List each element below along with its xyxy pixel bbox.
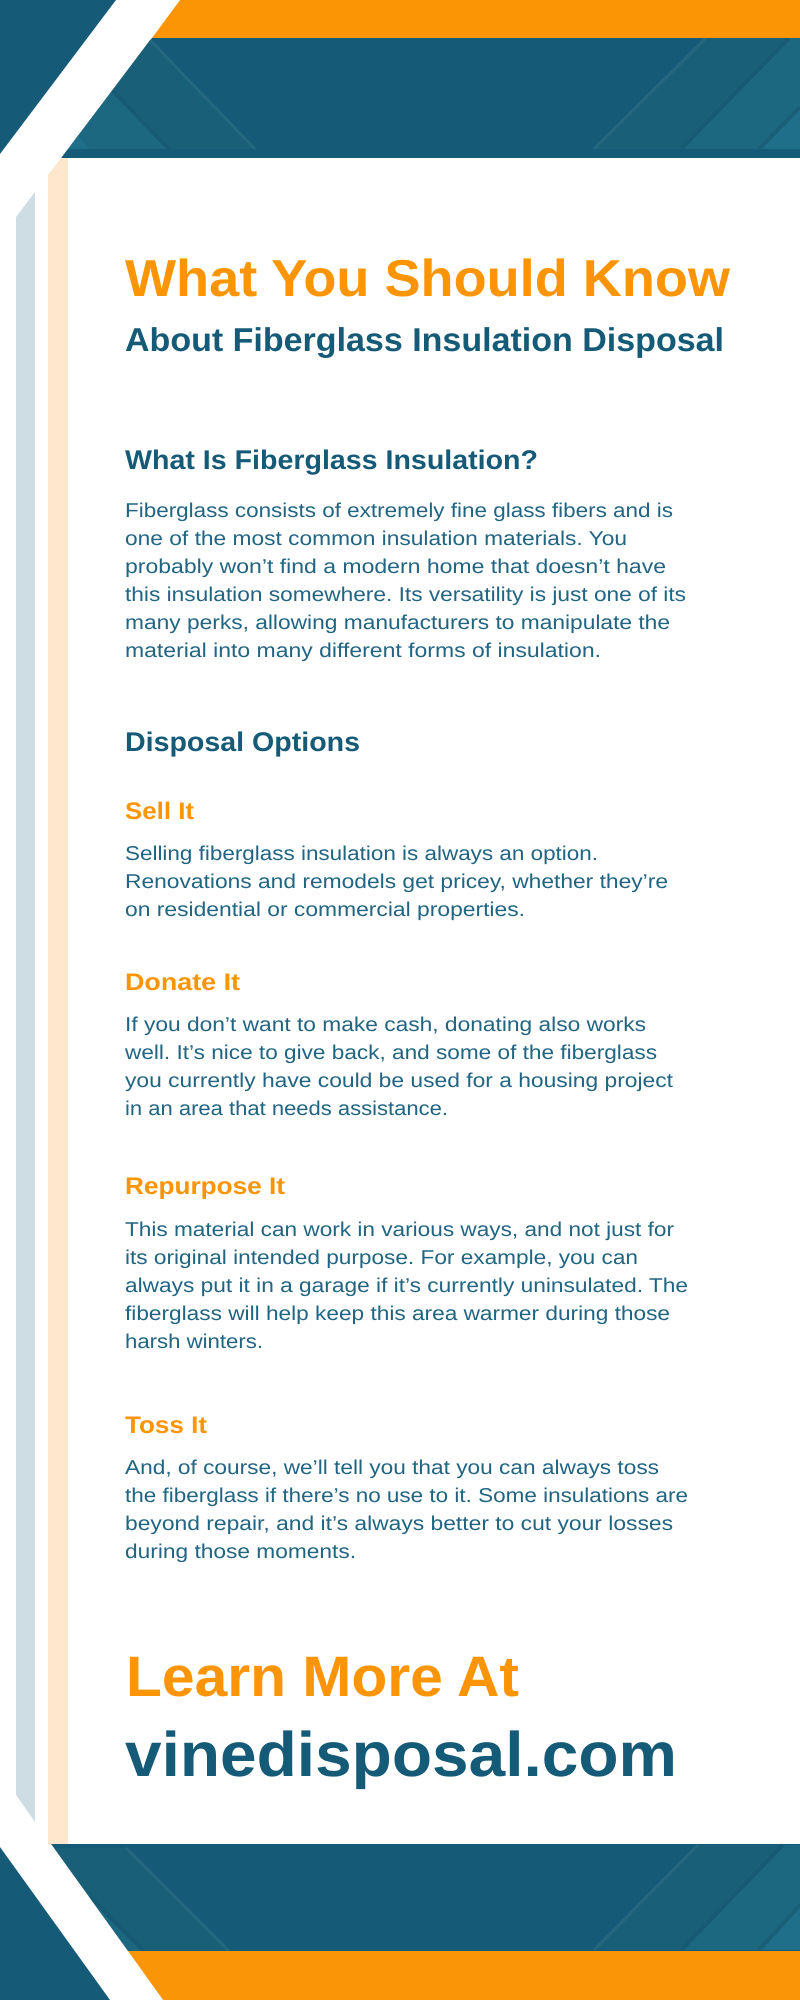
option heading: Sell It <box>125 798 194 825</box>
option heading: Donate It <box>125 969 240 996</box>
section text: many perks, allowing manufacturers to manipulate the <box>125 612 670 634</box>
option heading: Toss It <box>125 1412 207 1439</box>
option text <box>125 1219 688 1353</box>
title: What You Should Know <box>125 250 731 308</box>
option: sell it <box>125 798 668 921</box>
section text: material into many different forms of insulation. <box>125 640 601 662</box>
option text <box>124 1014 674 1120</box>
option text <box>125 843 668 921</box>
option: donate it <box>124 969 674 1120</box>
website: vinedisposal.com <box>125 1720 677 1790</box>
top white diagonal <box>0 0 180 158</box>
option heading: Repurpose It <box>125 1173 285 1200</box>
side stripe: pale orange <box>48 158 68 1844</box>
section text: one of the most common insulation materials. You <box>125 528 627 550</box>
section text: probably won’t find a modern home that doesn’t have <box>125 556 666 578</box>
option text: always put it in a garage if it’s currently uninsulated. The <box>125 1275 688 1297</box>
heading: disposal options: Disposal Options <box>125 727 360 757</box>
bottom white diagonal <box>0 1844 163 2000</box>
option text: during those moments. <box>125 1541 356 1563</box>
bottom left blue corner <box>0 1847 110 2000</box>
option text: And, of course, we’ll tell you that you can always toss <box>125 1457 659 1479</box>
bottom orange bar <box>128 1951 800 2000</box>
side stripe: pale blue <box>16 192 35 1822</box>
top blue band <box>61 38 800 158</box>
top left blue corner <box>0 0 116 154</box>
section text <box>125 500 686 662</box>
option text <box>125 1457 688 1563</box>
section heading: What Is Fiberglass Insulation? <box>125 445 538 475</box>
top orange bar <box>152 0 800 38</box>
subtitle: About Fiberglass Insulation Disposal <box>125 321 724 358</box>
section: what is fiberglass insulation <box>125 445 686 662</box>
option text: on residential or commercial properties. <box>125 899 525 921</box>
bottom left facets <box>54 1848 230 1951</box>
call to action <box>125 1645 677 1790</box>
option: toss it <box>125 1412 688 1563</box>
top left facets <box>68 40 256 149</box>
section text: this insulation somewhere. Its versatility is just one of its <box>125 584 686 606</box>
option text: in an area that needs assistance. <box>125 1098 448 1120</box>
option: repurpose it <box>125 1173 688 1353</box>
option text: If you don’t want to make cash, donating also works <box>125 1014 646 1036</box>
bottom banner <box>0 1844 800 2000</box>
option text: harsh winters. <box>125 1331 263 1353</box>
top right facets <box>592 38 800 149</box>
option text: you currently have could be used for a housing project <box>125 1070 674 1092</box>
call to action heading: Learn More At <box>126 1645 519 1709</box>
section text: Fiberglass consists of extremely fine glass fibers and is <box>125 500 673 522</box>
option text: Selling fiberglass insulation is always an option. <box>125 843 598 865</box>
option text: its original intended purpose. For example, you can <box>125 1247 638 1269</box>
option text: beyond repair, and it’s always better to cut your losses <box>125 1513 673 1535</box>
option text: well. It’s nice to give back, and some of the fiberglass <box>124 1042 657 1064</box>
bottom right facets <box>592 1845 800 1950</box>
option text: This material can work in various ways, and not just for <box>125 1219 674 1241</box>
top banner <box>0 0 800 158</box>
option text: fiberglass will help keep this area warmer during those <box>125 1303 670 1325</box>
bottom blue band <box>51 1844 800 1951</box>
option text: Renovations and remodels get pricey, whether they’re <box>125 871 668 893</box>
option text: the fiberglass if there’s no use to it. Some insulations are <box>125 1485 688 1507</box>
